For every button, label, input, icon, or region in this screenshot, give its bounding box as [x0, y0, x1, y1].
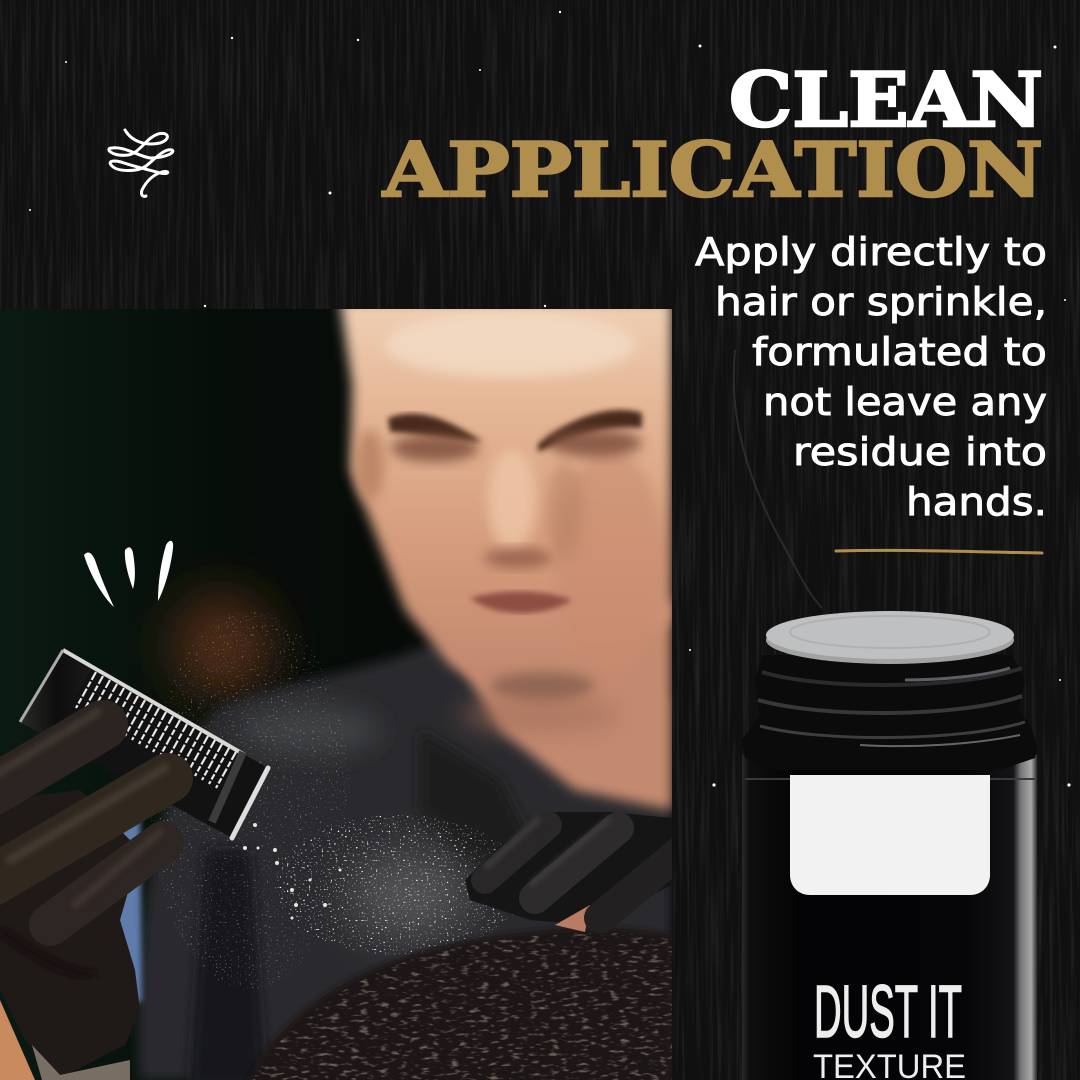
gold divider line	[836, 550, 1042, 553]
hair of client	[245, 928, 672, 1080]
icon: script LL logo	[109, 130, 173, 196]
bottle threaded neck	[742, 655, 1037, 770]
barber shirt	[138, 640, 672, 1080]
facial features	[356, 410, 642, 700]
left hand in black glove	[0, 712, 168, 1080]
product bottle	[742, 611, 1037, 1080]
title	[382, 56, 1043, 214]
powder can	[20, 650, 268, 838]
blank white label	[790, 775, 990, 895]
body text: hands.	[906, 480, 1047, 524]
body text	[695, 230, 1047, 524]
barber right hand in black glove	[465, 812, 680, 932]
body text: Apply directly to	[695, 230, 1047, 274]
title line: CLEAN: CLEAN	[729, 56, 1043, 144]
title line: APPLICATION: APPLICATION	[382, 126, 1043, 214]
icon: emphasis sparks	[84, 541, 173, 607]
blue sleeve	[120, 821, 146, 1006]
blurred background figure	[170, 593, 274, 697]
barber neck	[445, 600, 672, 810]
body text: residue into	[793, 430, 1047, 474]
body text: not leave any	[763, 380, 1047, 424]
body text: hair or sprinkle,	[715, 280, 1047, 324]
powder cloud	[150, 610, 525, 990]
bottle lid	[766, 611, 1014, 664]
barber head and face	[340, 300, 672, 697]
bottle body	[742, 755, 1037, 1080]
body text: formulated to	[752, 330, 1047, 374]
photo: barber applying powder	[0, 300, 680, 1080]
